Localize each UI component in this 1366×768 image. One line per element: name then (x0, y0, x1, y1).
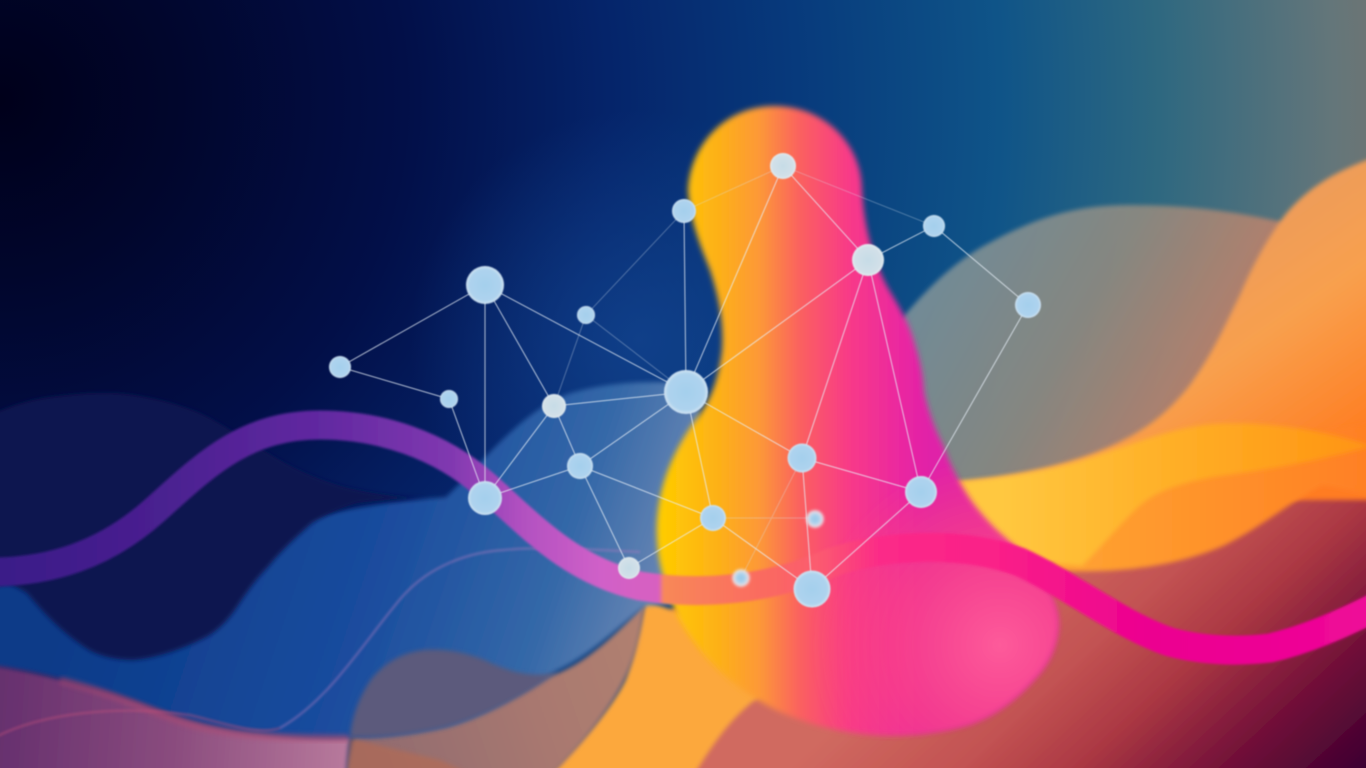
blue wave, left (0, 382, 700, 738)
glow in lower blob (863, 484, 1060, 735)
orange wave, bottom centre (554, 602, 758, 768)
faint network connections (554, 166, 934, 578)
thin curved line, bottom left (0, 548, 640, 740)
flowing ribbon (0, 425, 1366, 650)
orange under-band, right (1054, 464, 1334, 574)
red tint along pink wave edge (60, 680, 348, 738)
pink wave, bottom left (0, 664, 350, 768)
network connections (340, 166, 1028, 589)
peach shade, bottom centre corner (346, 736, 458, 768)
network nodes (329, 153, 1041, 608)
dark violet wave, left (0, 393, 450, 660)
dark overlap where peach meets blue (350, 650, 558, 737)
translucent grey wave, upper right (902, 202, 1282, 482)
background glow behind network centre (454, 177, 721, 436)
orange wave, right (950, 152, 1366, 500)
lower right dark red field (668, 498, 1366, 768)
yellow wave, right (955, 423, 1366, 566)
central gradient blob (657, 106, 1058, 735)
peach wave, bottom centre (345, 603, 645, 768)
